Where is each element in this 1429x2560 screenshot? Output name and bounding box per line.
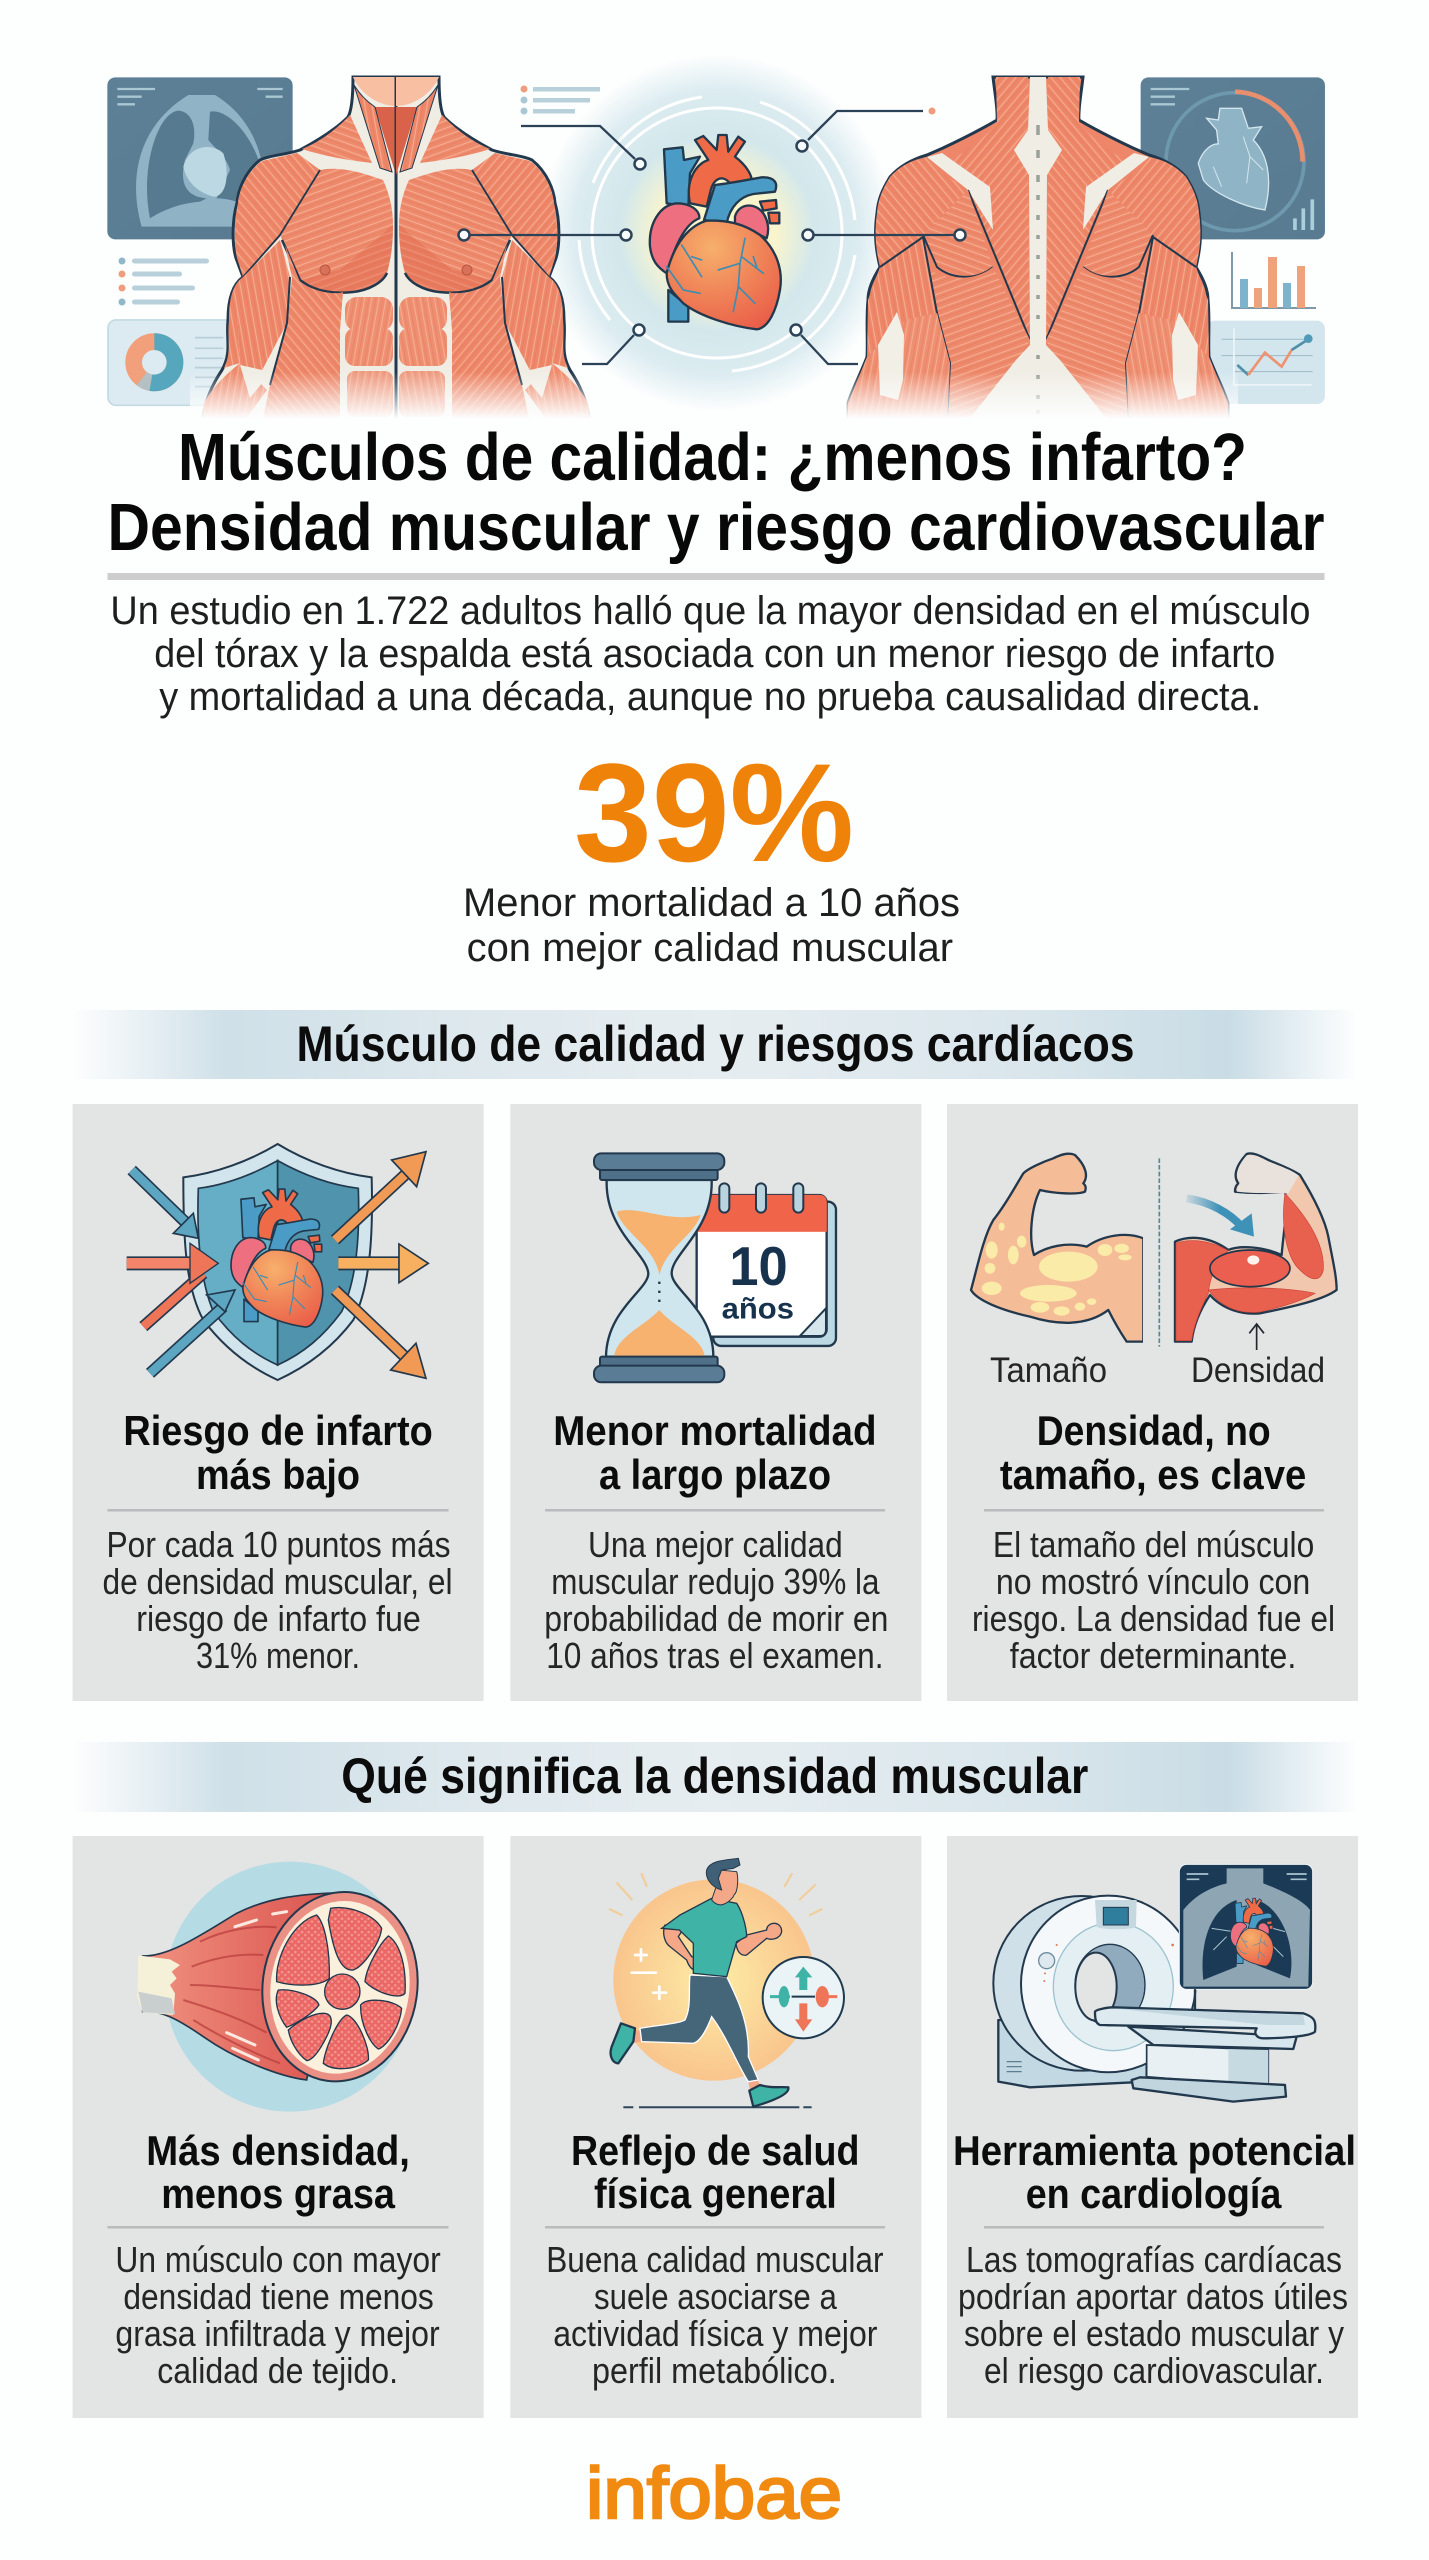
card body xyxy=(102,1524,452,1676)
intro text: Un estudio en 1.722 adultos halló que la mayor densidad en el músculo xyxy=(110,589,1310,633)
bottom fade left xyxy=(190,372,605,427)
panel: densidad no tamaño xyxy=(947,1104,1358,1701)
card body xyxy=(544,1524,888,1676)
card body: Por cada 10 puntos más xyxy=(106,1524,450,1565)
card body: actividad física y mejor xyxy=(553,2313,878,2354)
label: tamaño: Tamaño xyxy=(990,1351,1107,1390)
title xyxy=(108,420,1324,565)
section header 2: Qué significa la densidad muscular xyxy=(341,1748,1088,1804)
card heading xyxy=(553,1407,876,1498)
hero illustration xyxy=(107,55,1325,427)
icon: hourglass and calendar: años xyxy=(722,1292,794,1325)
figure: back torso xyxy=(848,77,1228,423)
line chart panel xyxy=(1207,321,1325,404)
heart xyxy=(650,135,781,329)
card body: podrían aportar datos útiles xyxy=(958,2276,1348,2317)
card heading: en cardiología xyxy=(1026,2170,1282,2217)
card heading: Riesgo de infarto xyxy=(123,1407,433,1454)
card heading: menos grasa xyxy=(161,2170,396,2217)
section header 1: Músculo de calidad y riesgos cardíacos xyxy=(296,1016,1134,1072)
donut chart panel xyxy=(108,320,255,405)
bottom fade right xyxy=(838,372,1238,427)
section header 2 xyxy=(73,1742,1357,1812)
card body: factor determinante. xyxy=(1010,1635,1296,1676)
icon: muscle cross-section xyxy=(137,1862,430,2112)
card heading xyxy=(571,2127,860,2217)
data list left xyxy=(118,258,209,306)
card body: El tamaño del músculo xyxy=(993,1524,1314,1565)
icon: hourglass and calendar: 10 xyxy=(729,1235,788,1297)
statistic caption xyxy=(463,881,960,970)
card body: riesgo. La densidad fue el xyxy=(972,1598,1335,1639)
icon: hourglass and calendar xyxy=(594,1153,836,1382)
intro text: y mortalidad a una década, aunque no prueba causalidad directa. xyxy=(159,675,1261,719)
card heading xyxy=(1000,1407,1306,1498)
logo: infobae: infobae xyxy=(586,2454,842,2534)
target rings xyxy=(579,97,855,371)
bar chart xyxy=(1232,252,1316,308)
title: Músculos de calidad: ¿menos infarto? xyxy=(178,420,1247,495)
card body xyxy=(546,2239,884,2391)
card body: riesgo de infarto fue xyxy=(136,1598,421,1639)
card heading xyxy=(953,2127,1356,2217)
icon: arms comparison xyxy=(971,1153,1337,1350)
card body: sobre el estado muscular y xyxy=(964,2313,1344,2354)
intro text xyxy=(110,589,1310,719)
icon: runner xyxy=(610,1858,844,2107)
figure: front torso xyxy=(202,77,590,423)
card body xyxy=(958,2239,1348,2391)
card body: el riesgo cardiovascular. xyxy=(984,2350,1324,2391)
card body: de densidad muscular, el xyxy=(102,1561,452,1602)
section header 1 xyxy=(73,1010,1357,1079)
card heading: más bajo xyxy=(196,1451,360,1498)
card heading: a largo plazo xyxy=(599,1451,831,1498)
cardiac scan panel xyxy=(1141,77,1325,239)
label: densidad: Densidad xyxy=(1191,1351,1325,1390)
card heading: tamaño, es clave xyxy=(1000,1451,1306,1498)
card heading: Menor mortalidad xyxy=(553,1407,876,1454)
icon: CT scanner xyxy=(993,1864,1315,2102)
panel: reflejo de salud xyxy=(510,1836,921,2418)
statistic caption: con mejor calidad muscular xyxy=(467,926,953,970)
card body: suele asociarse a xyxy=(594,2276,838,2317)
card heading: física general xyxy=(594,2170,837,2217)
card body: 31% menor. xyxy=(196,1635,360,1676)
statistic caption: Menor mortalidad a 10 años xyxy=(463,881,960,925)
card body: densidad tiene menos xyxy=(123,2276,434,2317)
data list center xyxy=(520,86,600,114)
card body: probabilidad de morir en xyxy=(544,1598,888,1639)
card heading xyxy=(123,1407,433,1498)
card body: 10 años tras el examen. xyxy=(546,1635,884,1676)
card body: grasa infiltrada y mejor xyxy=(115,2313,440,2354)
panel: herramienta potencial xyxy=(947,1836,1358,2418)
card heading: Densidad, no xyxy=(1037,1407,1271,1454)
panel: más densidad xyxy=(73,1836,484,2418)
card body: Las tomografías cardíacas xyxy=(966,2239,1342,2280)
icon: shield with heart and arrows xyxy=(127,1144,428,1380)
card body xyxy=(115,2239,441,2391)
center glow xyxy=(539,55,895,411)
chest x-ray panel xyxy=(107,77,293,239)
card body xyxy=(972,1524,1335,1676)
card body: no mostró vínculo con xyxy=(996,1561,1310,1602)
card body: Una mejor calidad xyxy=(588,1524,843,1565)
card heading: Reflejo de salud xyxy=(571,2127,860,2174)
card body: Buena calidad muscular xyxy=(546,2239,884,2280)
intro text: del tórax y la espalda está asociada con un menor riesgo de infarto xyxy=(154,632,1275,676)
panel: menor mortalidad xyxy=(510,1104,921,1701)
panel: riesgo de infarto xyxy=(73,1104,484,1701)
card body: Un músculo con mayor xyxy=(115,2239,441,2280)
connector lines xyxy=(458,108,966,364)
card body: muscular redujo 39% la xyxy=(551,1561,880,1602)
card heading: Herramienta potencial xyxy=(953,2127,1356,2174)
card heading xyxy=(146,2127,410,2217)
card body: calidad de tejido. xyxy=(157,2350,398,2391)
card body: perfil metabólico. xyxy=(592,2350,837,2391)
key statistic: 39% xyxy=(574,734,854,891)
card heading: Más densidad, xyxy=(146,2127,410,2174)
